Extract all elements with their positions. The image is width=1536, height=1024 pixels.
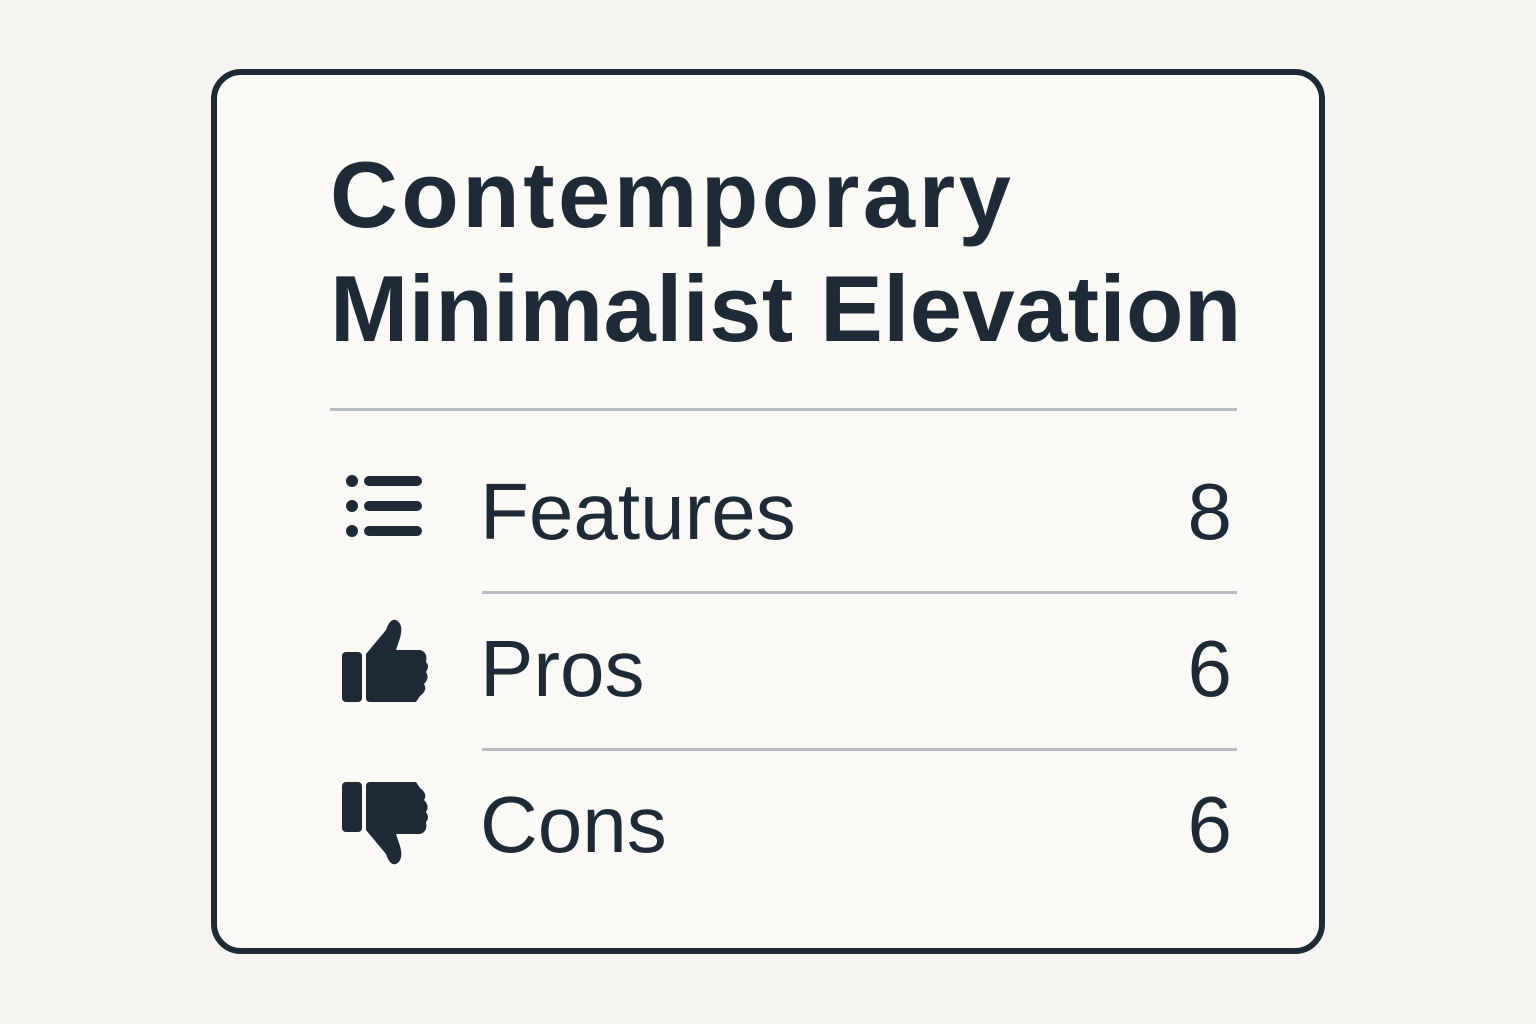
row: cons: Cons bbox=[480, 780, 667, 869]
title bbox=[330, 142, 1242, 361]
row: pros: Pros bbox=[480, 624, 644, 713]
card panel bbox=[211, 69, 1325, 954]
icon: thumbs down bbox=[342, 782, 428, 864]
title: Contemporary bbox=[330, 142, 1014, 247]
icon: list bbox=[346, 475, 422, 537]
number: pros: 6 bbox=[1188, 624, 1232, 713]
row: features: Features bbox=[480, 467, 796, 556]
number: cons: 6 bbox=[1188, 780, 1232, 869]
icon: thumbs up bbox=[342, 620, 428, 702]
number: features: 8 bbox=[1188, 467, 1232, 556]
title: Minimalist Elevation bbox=[330, 256, 1242, 361]
